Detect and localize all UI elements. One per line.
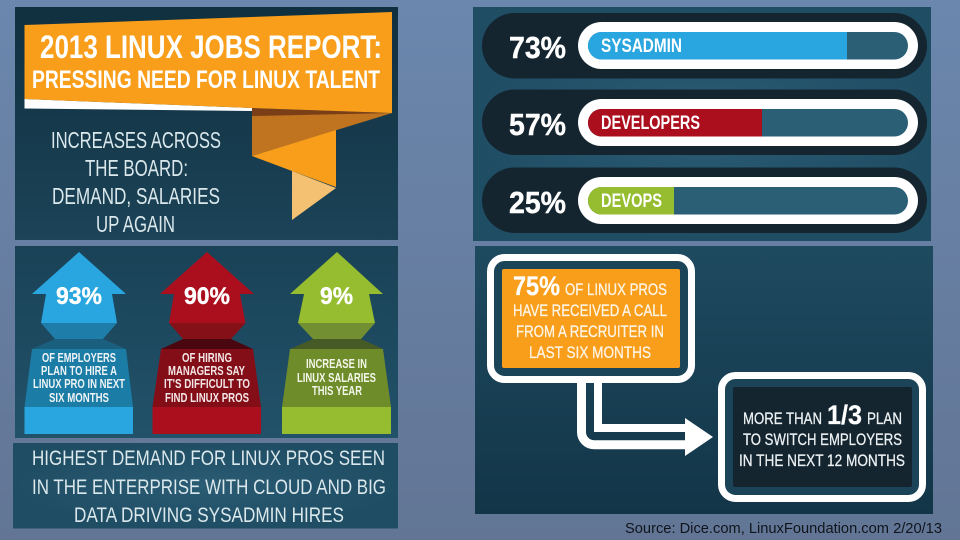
bar: devops 25% xyxy=(482,168,927,233)
ribbon banner xyxy=(24,12,392,220)
arrow: 9% salaries: 9% xyxy=(320,283,353,310)
panel: highest demand text: HIGHEST DEMAND FOR LINUX PROS SEEN xyxy=(32,447,385,470)
callout: 75% recruiter xyxy=(490,258,692,380)
arrow: 90% hiring managers: MANAGERS SAY xyxy=(168,363,245,378)
arrow: 9% salaries: INCREASE IN xyxy=(306,356,367,371)
arrow: 93% employers: PLAN TO HIRE A xyxy=(41,363,117,378)
arrow: 90% hiring managers: IT'S DIFFICULT TO xyxy=(164,376,250,391)
callout: 75% recruiter: OF LINUX PROS xyxy=(565,280,667,299)
source note: Source: Dice.com, LinuxFoundation.com 2/20/13 xyxy=(625,521,942,537)
arrow: 93% employers: 93% xyxy=(56,283,102,310)
arrow: 9% salaries: THIS YEAR xyxy=(312,383,362,398)
bar: sysadmin 73%: 73% xyxy=(509,30,566,65)
subtitle text: INCREASES ACROSS xyxy=(51,127,221,153)
arrow: 93% employers: SIX MONTHS xyxy=(49,390,109,405)
arrow: connector xyxy=(581,380,713,456)
bar: sysadmin 73%: SYSADMIN xyxy=(601,36,682,57)
arrow: 93% employers: OF EMPLOYERS xyxy=(42,350,116,365)
bar: devops 25%: 25% xyxy=(509,185,566,220)
arrow: 9% salaries xyxy=(282,252,391,434)
panel: highest demand text xyxy=(13,443,398,528)
subtitle text: THE BOARD: xyxy=(85,155,188,181)
callout: 75% recruiter: FROM A RECRUITER IN xyxy=(516,322,664,341)
callout: one third switching xyxy=(722,376,922,498)
arrow: 90% hiring managers: 90% xyxy=(184,283,230,310)
callout: one third switching: 1/3 xyxy=(827,400,862,430)
bar: developers 57% xyxy=(482,90,927,155)
callout: 75% recruiter: LAST SIX MONTHS xyxy=(529,343,651,362)
subtitle text: DEMAND, SALARIES xyxy=(52,183,220,209)
panel: highest demand text: IN THE ENTERPRISE WITH CLOUD AND BIG xyxy=(32,476,386,499)
callout: one third switching: PLAN xyxy=(867,409,902,428)
bar: developers 57%: DEVELOPERS xyxy=(601,113,700,134)
title xyxy=(32,29,382,94)
arrow: 90% hiring managers xyxy=(152,252,261,434)
arrow: 90% hiring managers: FIND LINUX PROS xyxy=(165,390,249,405)
panel: recruiter flow xyxy=(475,246,933,514)
title: PRESSING NEED FOR LINUX TALENT xyxy=(32,66,380,94)
callout: one third switching: TO SWITCH EMPLOYERS xyxy=(743,430,902,449)
panel: title and ribbon xyxy=(15,7,398,240)
callout: one third switching: IN THE NEXT 12 MONTHS xyxy=(739,451,905,470)
subtitle text: UP AGAIN xyxy=(96,211,175,237)
callout: one third switching: MORE THAN xyxy=(743,409,822,428)
subtitle text xyxy=(51,127,221,237)
panel: up arrows xyxy=(15,246,398,438)
arrow: 93% employers xyxy=(24,252,133,434)
bar: sysadmin 73% xyxy=(482,13,927,78)
callout: 75% recruiter: HAVE RECEIVED A CALL xyxy=(513,301,667,320)
bar: devops 25%: DEVOPS xyxy=(601,191,662,212)
callout: 75% recruiter: 75% xyxy=(513,271,560,301)
panel: role bars xyxy=(473,7,931,241)
arrow: 93% employers: LINUX PRO IN NEXT xyxy=(33,376,125,391)
arrow: 90% hiring managers: OF HIRING xyxy=(182,350,232,365)
bar: developers 57%: 57% xyxy=(509,107,566,142)
title: 2013 LINUX JOBS REPORT: xyxy=(40,29,382,65)
panel: highest demand text: DATA DRIVING SYSADMIN HIRES xyxy=(74,504,344,527)
arrow: 9% salaries: LINUX SALARIES xyxy=(297,370,376,385)
